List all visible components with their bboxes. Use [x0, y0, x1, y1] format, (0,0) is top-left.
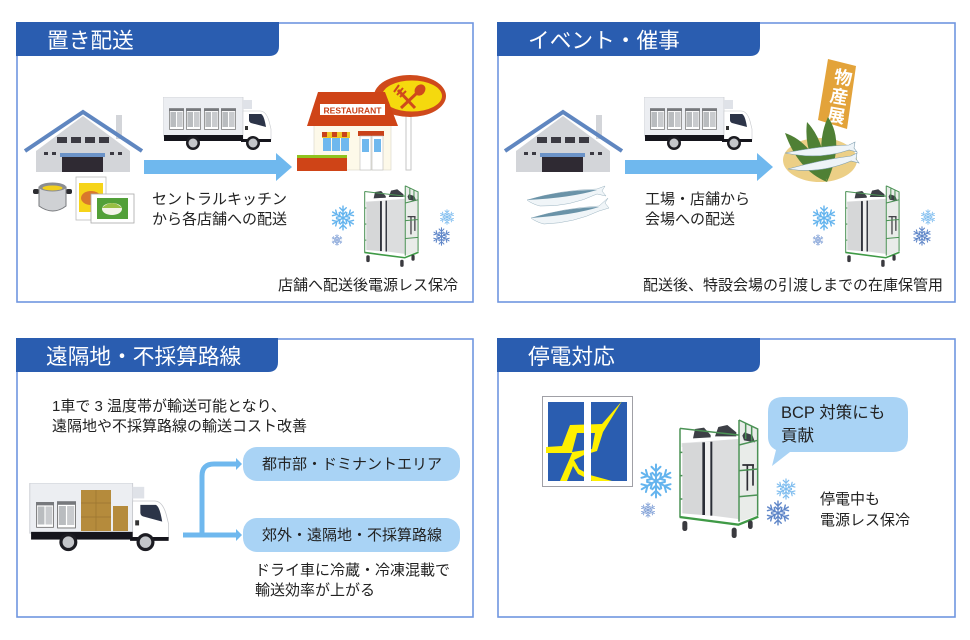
caption: 店舗へ配送後電源レス保冷: [278, 277, 458, 294]
text: transport cost: 1車で 3 温度帯が輸送可能となり、: [52, 398, 286, 415]
icon: snowflakes: [812, 206, 935, 246]
icon: insulated cart: [845, 186, 900, 267]
text: delivery description: [152, 191, 287, 228]
icon: insulated cart: [364, 186, 419, 267]
pill: rural: [243, 518, 460, 552]
text: transport cost: 遠隔地や不採算路線の輸送コスト改善: [52, 417, 307, 435]
heading: 遠隔地・不採算路線: [16, 338, 278, 372]
icon: snowflakes: [331, 206, 454, 246]
icon: fish: [527, 186, 609, 224]
heading: イベント・催事: イベント・催事: [528, 28, 680, 53]
text: transport cost: [52, 398, 307, 435]
text: delivery description: セントラルキッチン: [152, 191, 287, 208]
text: delivery description: 会場への配送: [645, 211, 735, 228]
text: delivery description: 工場・店舗から: [645, 191, 750, 208]
icon: local products sign and fish plate: [783, 59, 859, 182]
panel: 遠隔地・不採算路線: [16, 338, 473, 617]
callout: BCP: BCP 対策にも: [781, 403, 885, 422]
text: power outage: 停電中も: [820, 491, 880, 508]
icon: warehouse: [505, 112, 622, 172]
icon: restaurant: [297, 75, 446, 171]
text: efficiency: [255, 562, 450, 599]
heading: 置き配送: [16, 22, 279, 56]
text: delivery description: から各店舗への配送: [152, 211, 287, 228]
icon: local products sign and fish plate: 物: [832, 67, 854, 90]
panel: 停電対応: [497, 338, 955, 617]
icon: local products sign and fish plate: 産: [828, 86, 850, 109]
icon: truck with racks: [163, 97, 271, 150]
icon: local products sign and fish plate: 展: [825, 105, 847, 128]
heading: 置き配送: 置き配送: [47, 28, 134, 53]
callout: BCP: 貢献: [781, 426, 814, 445]
text: efficiency: 輸送効率が上がる: [255, 582, 375, 599]
icon: snowflakes: [639, 464, 796, 525]
panel: 置き配送: [16, 22, 473, 302]
icon: pot: [33, 182, 72, 211]
pill: urban: 都市部・ドミナントエリア: [262, 456, 442, 473]
icon: food packs: [76, 177, 134, 223]
icon: restaurant: RESTAURANT: [324, 106, 382, 116]
heading: 遠隔地・不採算路線: 遠隔地・不採算路線: [46, 344, 242, 369]
text: power outage: [820, 491, 910, 529]
arrow: [625, 153, 773, 181]
text: power outage: 電源レス保冷: [820, 512, 910, 529]
icon: truck with cargo: [30, 483, 169, 551]
text: delivery description: [645, 191, 750, 228]
icon: warehouse: [25, 112, 142, 172]
caption: 配送後、特設会場の引渡しまでの在庫保管用: [643, 276, 943, 294]
arrow: [144, 153, 292, 181]
icon: insulated cart: [680, 420, 758, 538]
pill: urban: [243, 447, 460, 481]
pill: rural: 郊外・遠隔地・不採算路線: [262, 526, 442, 544]
callout: BCP: [768, 397, 908, 466]
heading: 停電対応: [497, 338, 760, 372]
heading: 停電対応: 停電対応: [528, 344, 615, 369]
heading: イベント・催事: [497, 22, 760, 56]
panel: イベント・催事: [497, 22, 955, 302]
icon: truck with racks: [644, 97, 752, 150]
arrows: branching routes: [183, 458, 242, 541]
icon: window with lightning: [542, 396, 632, 486]
text: efficiency: ドライ車に冷蔵・冷凍混載で: [255, 562, 450, 579]
